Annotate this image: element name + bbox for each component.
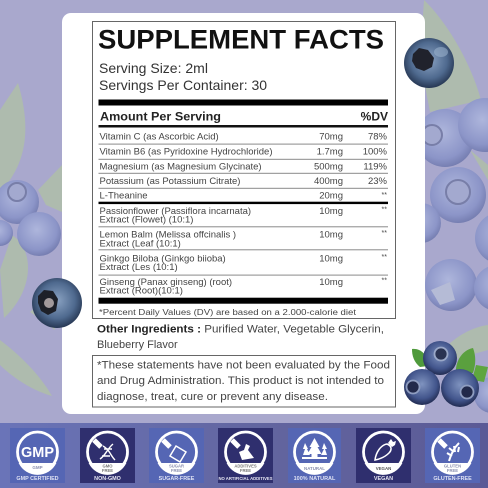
badge: sugar free bbox=[149, 428, 204, 483]
amount header: %DV bbox=[361, 110, 388, 124]
ingredient rows: Lemon Balm (Melissa offcinalis ) bbox=[100, 230, 236, 241]
ingredient rows: ** bbox=[382, 254, 387, 261]
badge: GMP: GMP bbox=[21, 444, 54, 461]
badge: gluten free: GLUTEN-FREE bbox=[433, 476, 472, 482]
other ingredients bbox=[97, 323, 384, 351]
ingredient rows: 1.7mg bbox=[317, 146, 343, 157]
badge: natural: NATURAL bbox=[304, 466, 325, 471]
badge: gluten free bbox=[425, 428, 480, 483]
ingredient rows: Vitamin B6 (as Pyridoxine Hydrochloride) bbox=[100, 146, 273, 157]
other ingredients: Other Ingredients : Purified Water, Vegetable Glycerin, bbox=[97, 323, 384, 335]
amount header bbox=[100, 110, 388, 124]
badge: natural: 100% NATURAL bbox=[294, 476, 336, 482]
ingredient rows: 10mg bbox=[319, 253, 343, 264]
supplement facts label bbox=[92, 22, 396, 318]
badge: additives free: ADDITIVES bbox=[234, 464, 257, 468]
ingredient rows: ** bbox=[382, 278, 387, 284]
badge: additives free: NO ARTIFICIAL ADDITIVES bbox=[218, 476, 273, 481]
ingredient rows: ** bbox=[382, 206, 387, 214]
ingredient rows: Extract (Leaf (10:1) bbox=[100, 238, 181, 249]
pale blueberries bbox=[0, 98, 488, 413]
ingredient rows: 23% bbox=[368, 176, 388, 187]
badge: sugar free: SUGAR bbox=[169, 464, 184, 468]
blueberry: top right bbox=[404, 38, 454, 88]
blueberry: left bbox=[32, 278, 82, 328]
badge: non-GMO: GMO bbox=[102, 464, 113, 468]
other ingredients: Blueberry Flavor bbox=[97, 339, 178, 351]
badge: non-GMO: NON-GMO bbox=[94, 476, 121, 482]
ingredient rows: 10mg bbox=[319, 230, 343, 241]
ingredient rows: 119% bbox=[363, 161, 388, 172]
ingredient rows: Extract (Les (10:1) bbox=[100, 262, 178, 273]
badge: vegan: VEGAN bbox=[376, 466, 391, 471]
blueberry cluster with leaves bbox=[404, 341, 488, 407]
ingredient rows: 10mg bbox=[319, 206, 343, 217]
ingredient rows: 400mg bbox=[314, 176, 343, 187]
daily value note: *Percent Daily Values (DV) are based on a 2.000-calorie diet bbox=[99, 307, 357, 317]
disclaimer box: diagnose, treat, cure or prevent any disease. bbox=[97, 391, 328, 403]
bottom thick bar bbox=[98, 298, 388, 304]
header rule bbox=[98, 125, 388, 128]
disclaimer box bbox=[92, 356, 396, 407]
ingredient rows: Extract (Root)(10:1) bbox=[100, 286, 183, 297]
badge: GMP bbox=[10, 428, 65, 483]
ingredient rows: 10mg bbox=[319, 277, 343, 288]
ingredient rows: 70mg bbox=[319, 131, 343, 142]
ingredient rows: 500mg bbox=[314, 161, 343, 172]
ingredient rows: Vitamin C (as Ascorbic Acid) bbox=[100, 131, 219, 142]
ingredient rows: L-Theanine bbox=[100, 191, 148, 202]
ingredient rows: Passionflower (Passiflora incarnata) bbox=[100, 206, 251, 217]
label frame bbox=[92, 22, 396, 318]
ingredient rows: Ginkgo Biloba (Ginkgo biioba) bbox=[100, 253, 226, 264]
ingredient rows: Ginseng (Panax ginseng) (root) bbox=[100, 277, 232, 288]
disclaimer box: *These statements have not been evaluated by the Food bbox=[97, 359, 390, 371]
serving info: Serving Size: 2ml bbox=[99, 60, 208, 76]
badge: gluten free: GLUTEN bbox=[444, 464, 461, 468]
badge: non-GMO bbox=[80, 428, 135, 483]
ingredient rows: 20mg bbox=[319, 191, 343, 202]
badge: vegan: VEGAN bbox=[374, 476, 393, 482]
badge: GMP: GMP CERTIFIED bbox=[16, 476, 59, 482]
ingredient rows: ** bbox=[382, 192, 387, 199]
ingredient rows: 78% bbox=[368, 131, 388, 142]
ingredient rows: Magnesium (as Magnesium Glycinate) bbox=[100, 161, 262, 172]
ingredient rows: ** bbox=[382, 230, 387, 237]
title: SUPPLEMENT FACTS bbox=[98, 24, 384, 54]
row dividers bbox=[98, 144, 388, 276]
disclaimer box: and Drug Administration. This product is not intended to bbox=[97, 375, 384, 387]
badge: vegan bbox=[356, 428, 411, 483]
badge: sugar free: SUGAR-FREE bbox=[159, 476, 195, 482]
top thick bar bbox=[98, 100, 388, 106]
badge: non-GMO: FREE bbox=[102, 468, 113, 473]
badge: sugar free: FREE bbox=[171, 468, 182, 473]
white panel bbox=[62, 13, 425, 414]
ingredient rows: 100% bbox=[363, 146, 388, 157]
badge: natural bbox=[288, 428, 341, 483]
serving info: Servings Per Container: 30 bbox=[99, 77, 267, 93]
badge: GMP: GMP bbox=[32, 465, 43, 470]
ingredient rows bbox=[100, 131, 388, 297]
serving info bbox=[99, 60, 267, 93]
ingredient rows: Potassium (as Potassium Citrate) bbox=[100, 176, 240, 187]
badge: additives free bbox=[218, 428, 273, 483]
amount header: Amount Per Serving bbox=[100, 110, 221, 124]
badge: additives free: FREE bbox=[240, 468, 251, 473]
badge: gluten free: FREE bbox=[447, 468, 458, 473]
ingredient rows: Extract (Flowet) (10:1) bbox=[100, 215, 193, 226]
badge strip bbox=[0, 423, 488, 488]
